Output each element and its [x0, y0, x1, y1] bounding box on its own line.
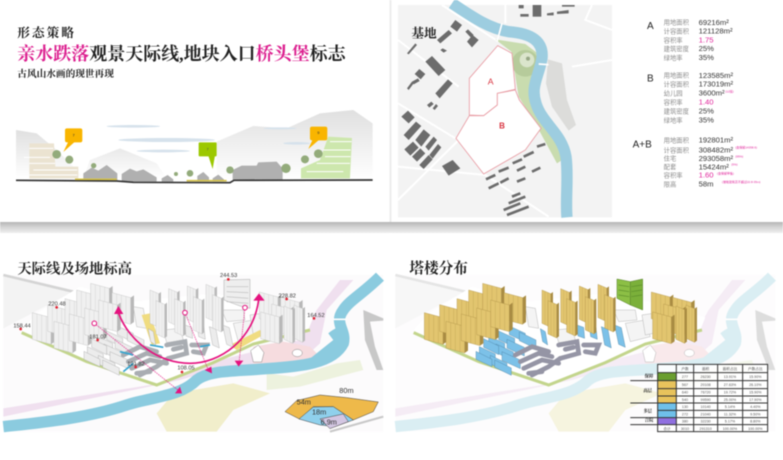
data table: 4.40%: [750, 405, 761, 409]
data table: 15.90%: [749, 391, 762, 395]
stats A+B: [633, 135, 760, 189]
trees: [52, 149, 323, 177]
plot A: A: [488, 77, 494, 87]
stats A: 69216m²: [699, 18, 729, 27]
callout: green centre: 7: [207, 146, 210, 151]
data table: 277: [682, 375, 688, 379]
stats A+B: 308482m²: [699, 145, 734, 154]
stats A: [647, 18, 733, 62]
elevation labels: [13, 273, 325, 373]
site map: [395, 275, 775, 432]
data table: 567: [682, 383, 688, 387]
stats B: 3600m²: [699, 89, 725, 98]
panel: tower distribution: [392, 233, 783, 460]
callout: yellow right: 9: [317, 130, 320, 135]
green tower: [301, 137, 352, 178]
data table: 户数占比: [748, 366, 763, 371]
elevation labels: 164.52: [307, 313, 325, 319]
heading: 塔楼分布: [409, 259, 468, 277]
stats A: A: [647, 21, 654, 32]
data table: 保障: [645, 373, 654, 380]
data table: 380: [682, 420, 688, 424]
stats A: 用地面积: [664, 18, 690, 27]
elevation labels: 244.53: [220, 273, 237, 279]
data table: 19.72%: [724, 391, 737, 395]
beige tower: [24, 143, 78, 178]
data table: 272: [682, 412, 688, 416]
callout: yellow left: 7: [73, 133, 76, 138]
data table: 540: [682, 398, 688, 402]
stats A: 容积率: [664, 36, 683, 45]
data table: 100.00%: [723, 427, 738, 431]
stats B: [647, 71, 734, 125]
panel: skyline and elevations: [0, 233, 390, 460]
data table: 5.14%: [725, 405, 736, 409]
stats B: 1.40: [699, 98, 714, 107]
plot B: B: [499, 122, 505, 131]
height zone legend: 18m: [312, 407, 326, 416]
plot B: [456, 90, 541, 174]
stats B: 用地面积: [664, 71, 690, 80]
stats A+B: 容积率: [664, 170, 683, 179]
data table: 3010: [681, 427, 689, 431]
data table: 户数: [681, 366, 689, 371]
elevation labels: 181.07: [89, 334, 107, 340]
data table: 291310: [700, 427, 712, 431]
stats B: 计容面积: [664, 79, 690, 88]
stats B: 建筑密度: [664, 107, 690, 116]
data table: 11.32%: [724, 412, 737, 416]
data table: 26230: [701, 375, 711, 379]
stats B: 173019m²: [699, 79, 734, 88]
stats A: 35%: [699, 53, 714, 62]
callout: yellow left: [63, 128, 82, 152]
data table: 20108: [701, 383, 711, 387]
base label: 基地: [411, 25, 437, 40]
stats B: 容积率: [664, 98, 683, 107]
panel: site plan: [398, 3, 760, 217]
data table: 640: [682, 391, 688, 395]
data table: 15.90%: [749, 375, 762, 379]
stats A: 121128m²: [699, 26, 733, 35]
stats A+B: 配套: [664, 162, 677, 171]
panel: form strategy: [0, 0, 783, 233]
stats B: 绿地率: [664, 116, 683, 125]
surrounding buildings: [401, 5, 575, 215]
stats B: 25%: [699, 107, 714, 116]
stats A: 建筑密度: [664, 44, 690, 53]
data table: 10140: [701, 405, 711, 409]
height zone legend: 80m: [339, 386, 354, 395]
data table: 27.63%: [724, 383, 737, 387]
height zone legend: [285, 386, 383, 432]
stats A+B: 192801m²: [699, 136, 734, 145]
site map: [3, 275, 383, 432]
stats A: 计容面积: [664, 26, 690, 35]
elevation labels: 228.82: [279, 294, 296, 300]
data table: [630, 364, 768, 432]
title: form strategy: 形态策略: [17, 25, 76, 40]
stats A+B: 15424m²: [699, 162, 729, 171]
data table: 13.91%: [724, 375, 737, 379]
data table: 9.50%: [750, 412, 761, 416]
data table: 多层: [643, 408, 653, 415]
plot A: [469, 46, 515, 116]
stats A+B: 用地面积: [664, 135, 690, 144]
elevation labels: 101.82: [127, 362, 145, 368]
elevation labels: 158.44: [13, 323, 31, 329]
data table: 76720: [701, 391, 711, 395]
stats A+B: 1.60: [699, 171, 714, 180]
sightline arrows: [92, 293, 265, 393]
height zone legend: 54m: [297, 397, 311, 406]
stats A: 25%: [699, 44, 714, 53]
data table: 合院: [645, 417, 654, 424]
elevation labels: 108.05: [177, 366, 195, 372]
ground line: [16, 180, 373, 183]
skyline section illustration: [16, 110, 373, 183]
elevation labels: 220.48: [48, 302, 66, 308]
data table: 面积占比: [723, 366, 738, 371]
stats A+B: 58m: [699, 180, 714, 189]
data table: 高层: [643, 387, 653, 394]
subtitle: 古风山水画的现世再现: [17, 68, 114, 80]
stats B: 幼儿园: [664, 88, 683, 97]
stats A+B: 限高: [664, 179, 676, 188]
data table: 面积: [702, 366, 710, 371]
stats A+B: (95%): [735, 154, 743, 158]
data table: 130: [682, 405, 688, 409]
stats A+B: (坡地建筑高不超过22.8-35m): [722, 179, 760, 184]
stats B: 123585m²: [699, 71, 734, 80]
houses: [83, 162, 283, 182]
data table: 5.17%: [725, 420, 736, 424]
headline: 亲水跌落观景天际线,地块入口桥头堡标志: [17, 43, 348, 64]
stats B: B: [647, 74, 654, 85]
data table: 32230: [701, 420, 711, 424]
callout: green centre: [199, 142, 217, 169]
base map: [398, 3, 612, 217]
stats A: 绿地率: [664, 53, 683, 62]
stats A+B: (含保留甲板): [717, 171, 734, 176]
stats B: 35%: [699, 116, 714, 125]
data table: 21040: [701, 412, 711, 416]
heading: 天际线及场地标高: [17, 260, 132, 278]
stats A+B: 计容面积: [664, 145, 690, 154]
stats A+B: 293058m²: [699, 154, 734, 163]
data table: 100.00%: [748, 427, 763, 431]
stats B: (12班): [725, 89, 734, 94]
data table: 17.90%: [749, 398, 762, 402]
data table: 99590: [701, 398, 711, 402]
stats A+B: A+B: [633, 139, 652, 150]
data table: 25.00%: [724, 398, 737, 402]
stats A+B: (含保留14358.6): [735, 145, 757, 150]
stats A+B: (5%): [731, 163, 738, 167]
callout: yellow right: [308, 127, 327, 149]
data table: 26.10%: [749, 383, 762, 387]
height zone legend: 6.9m: [321, 418, 337, 427]
data table: 合计: [663, 426, 671, 431]
stats A+B: 住宅: [664, 154, 676, 163]
stats A: 1.75: [699, 36, 714, 45]
data table: 8.80%: [750, 420, 761, 424]
